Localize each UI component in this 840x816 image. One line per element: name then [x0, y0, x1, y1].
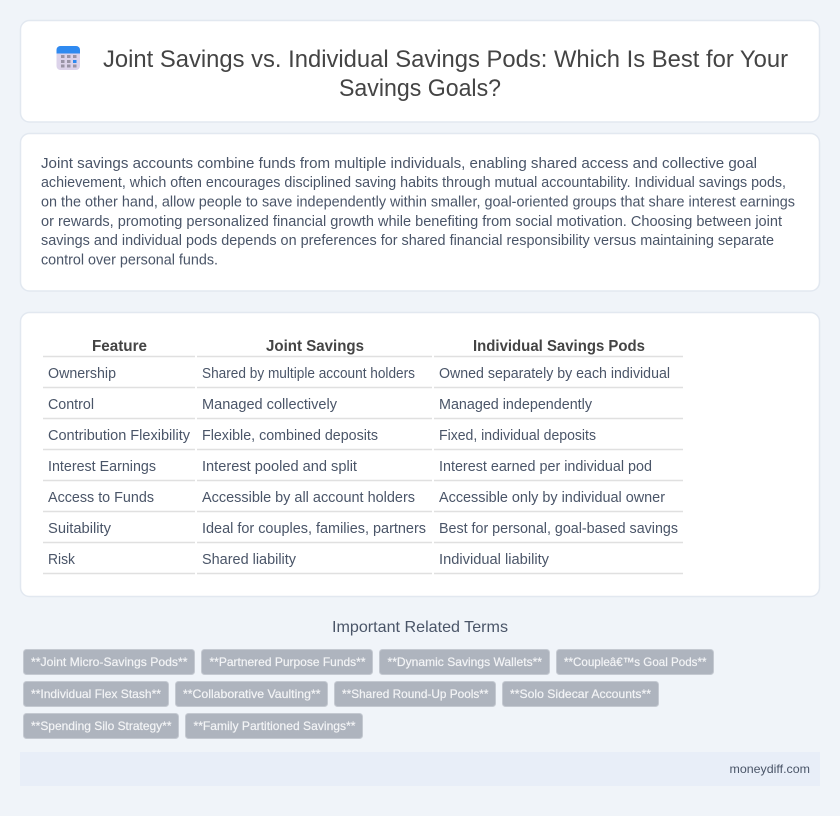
tag: **Spending Silo Strategy** — [31, 719, 172, 733]
table row: control: Managed collectively — [202, 397, 338, 413]
table row: contribution flexibility — [43, 428, 683, 450]
tag — [380, 650, 550, 674]
tag — [24, 714, 178, 738]
table row: risk — [43, 552, 683, 574]
icon: calendar — [56, 46, 80, 70]
tag: **Dynamic Savings Wallets** — [388, 655, 542, 669]
table row: access to funds — [43, 490, 683, 512]
tag: **Solo Sidecar Accounts** — [510, 687, 651, 701]
table row: control — [43, 397, 683, 418]
table header row — [43, 338, 683, 356]
tag: **Partnered Purpose Funds** — [210, 655, 366, 669]
panel: introduction — [20, 134, 820, 291]
table row: control: Control — [48, 397, 94, 413]
title: Joint Savings vs. Individual Savings Pods: Which Is Best for Your — [103, 46, 788, 73]
footer — [20, 752, 820, 786]
table row: contribution flexibility: Fixed, individual deposits — [439, 428, 596, 444]
text block: introduction paragraph: control over personal funds. — [41, 252, 218, 268]
table row: contribution flexibility: Contribution Flexibility — [48, 428, 191, 444]
footer: moneydiff.com — [730, 762, 810, 776]
table header row: Individual Savings Pods — [473, 338, 645, 355]
table row: ownership — [43, 366, 683, 388]
tag group: related terms — [24, 650, 714, 738]
table row: risk: Risk — [48, 552, 76, 568]
tag — [176, 682, 328, 706]
tag — [24, 650, 194, 674]
tag — [186, 714, 362, 738]
tag — [556, 650, 714, 674]
table row: suitability — [43, 521, 683, 542]
table row: interest earnings: Interest Earnings — [48, 459, 156, 475]
table header row: Joint Savings — [266, 338, 364, 355]
tag: **Coupleâ€™s Goal Pods** — [564, 655, 707, 669]
panel: comparison table — [20, 312, 820, 596]
tag: **Shared Round-Up Pools** — [342, 687, 489, 701]
table row: access to funds: Accessible only by individual owner — [439, 490, 665, 506]
table row: suitability: Best for personal, goal-based savings — [439, 521, 678, 537]
table row: access to funds: Access to Funds — [48, 490, 154, 506]
tag: **Family Partitioned Savings** — [194, 719, 356, 733]
table row: ownership: Owned separately by each individual — [439, 366, 670, 382]
table row: suitability: Suitability — [48, 521, 112, 537]
text block: introduction paragraph: savings and individual pods depends on preferences for shared financial responsibility versus maintaining separate — [41, 233, 774, 249]
table row: interest earnings — [43, 459, 683, 480]
text block: introduction paragraph: achievement, which often encourages disciplined saving habits through mutual accountability. Individual savings pods, — [41, 175, 786, 191]
tag: **Joint Micro-Savings Pods** — [31, 655, 188, 669]
text block: introduction paragraph: on the other hand, allow people to save independently within smaller, goal-oriented groups that share interest earnings — [41, 194, 795, 210]
table row: risk: Shared liability — [202, 552, 297, 568]
title: Savings Goals? — [339, 75, 501, 102]
table row: interest earnings: Interest earned per individual pod — [439, 459, 652, 475]
tag — [24, 682, 168, 706]
table row: access to funds: Accessible by all account holders — [202, 490, 415, 506]
heading: important related terms: Important Related Terms — [332, 619, 508, 636]
text block: introduction paragraph: Joint savings accounts combine funds from multiple individuals, enabling shared access and collective goal — [41, 156, 757, 172]
table row: suitability: Ideal for couples, families, partners — [202, 521, 426, 537]
table header row: Feature — [92, 338, 147, 355]
table row: risk: Individual liability — [439, 552, 550, 568]
tag — [202, 650, 372, 674]
tag: **Collaborative Vaulting** — [183, 687, 321, 701]
table row: ownership: Ownership — [48, 366, 116, 382]
text block: introduction paragraph — [41, 156, 795, 268]
panel: header — [20, 20, 820, 122]
table row: ownership: Shared by multiple account holders — [202, 366, 415, 382]
title — [103, 46, 788, 102]
tag — [502, 682, 658, 706]
table row: control: Managed independently — [439, 397, 593, 413]
tag — [334, 682, 496, 706]
table row: contribution flexibility: Flexible, combined deposits — [202, 428, 378, 444]
table row: interest earnings: Interest pooled and split — [202, 459, 357, 475]
text block: introduction paragraph: or rewards, promoting personalized financial growth while benefiting from social motivation. Choosing between joint — [41, 214, 782, 230]
tag: **Individual Flex Stash** — [31, 687, 161, 701]
